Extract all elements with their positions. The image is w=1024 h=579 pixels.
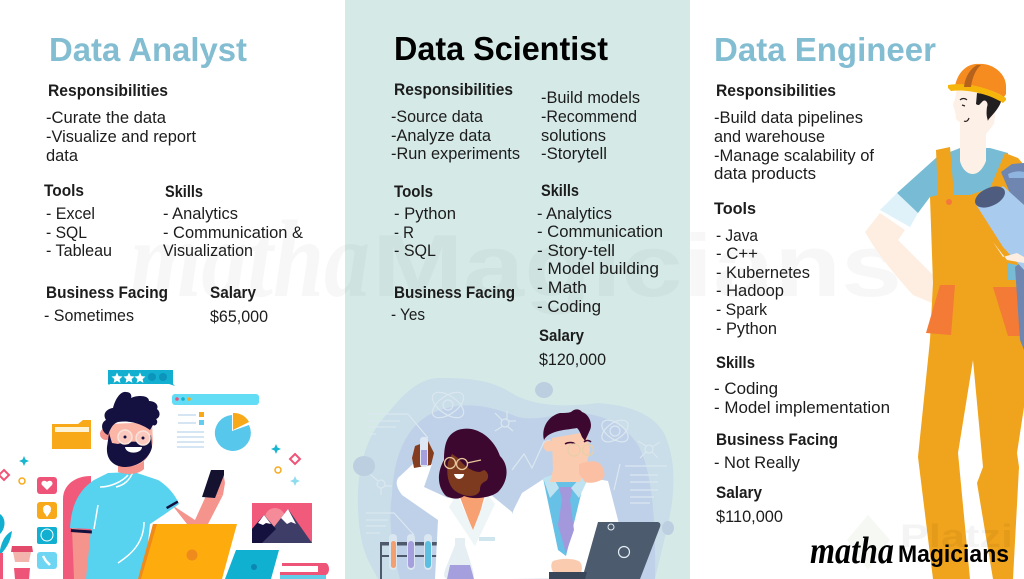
responsibilities: -Visualize and report [46,127,196,146]
business facing: - Not Really [714,453,800,472]
responsibilities column 1: -Source data [391,107,484,126]
responsibilities: Responsibilities [716,82,836,100]
skills: - Model building [537,259,659,278]
test tube rack [380,534,444,579]
skills: Skills [541,182,579,200]
watermark: platzi [847,515,1013,570]
responsibilities: -Curate the data [46,108,167,127]
tools: Tools [714,200,756,218]
skills: - Coding [537,297,601,316]
responsibilities column 1 [391,81,520,163]
salary: Salary [539,327,585,345]
responsibilities column 1: Responsibilities [394,81,513,99]
tools [44,182,112,260]
shirt [897,148,1008,213]
character body [70,392,225,579]
responsibilities column 2: -Build models [541,88,640,107]
watermark [130,198,902,320]
salary [716,484,783,526]
title: data analyst: Data Analyst [49,31,247,68]
tools: - Excel [46,204,95,223]
tools: - R [394,223,414,242]
business facing: - Yes [391,305,425,324]
salary: $65,000 [210,307,268,326]
responsibilities: data [46,146,79,165]
panel: data scientist background [345,0,690,579]
panel: data scientist [391,30,663,369]
tools: - Python [394,204,456,223]
logo: mathaMagicians: matha [810,530,894,572]
skills: - Story-tell [537,241,615,260]
plant and coffee cup [0,514,33,579]
tools: - Spark [716,300,767,319]
responsibilities column 2: solutions [541,126,606,145]
skills: Visualization [163,241,253,260]
business facing: Business Facing [394,284,515,302]
scientist woman [397,429,512,579]
small blobs [353,382,674,535]
tools: - SQL [46,223,87,242]
icon: folder [52,420,91,449]
tools [394,183,456,260]
watermark: matha [130,198,370,320]
tools: - Java [716,226,758,245]
tools: Tools [394,183,433,201]
responsibilities column 2: -Storytell [541,144,607,163]
safety helmet [948,64,1006,103]
business facing: Business Facing [716,431,838,449]
responsibilities [46,82,196,165]
arm and hand [865,213,938,303]
icons: app buttons [37,477,57,569]
responsibilities column 2 [541,88,640,163]
salary: Salary [716,484,763,502]
salary [210,284,268,326]
decorative blobs and atoms [366,387,667,535]
tools: - Hadoop [716,281,784,300]
responsibilities column 1: -Run experiments [391,144,520,163]
sleeve and cuff [880,193,918,227]
icon: rating banner [108,370,175,386]
responsibilities column 1: -Analyze data [391,126,492,145]
skills: - Analytics [537,204,612,223]
panel: data analyst [44,31,304,326]
panel: data engineer text [714,31,936,526]
decorative sparkles [0,444,300,486]
business facing: Business Facing [46,284,168,302]
responsibilities: Responsibilities [48,82,168,100]
skills: - Math [537,278,587,297]
background blob [358,378,674,579]
watermark: platzi: Platzi [900,518,1013,554]
skills [537,182,663,316]
overalls [918,147,1024,579]
skills [714,354,890,417]
rolled blueprints [972,163,1024,350]
business facing [44,284,168,325]
inner blob [390,405,655,579]
icon: report panel with pie chart [172,394,259,451]
skills: Skills [165,183,203,201]
bib button [946,199,952,205]
illustration: two scientists [353,378,674,579]
responsibilities: -Build data pipelines [714,108,863,127]
tools: - Tableau [46,241,112,260]
illustration: engineer [865,64,1024,579]
skills: - Model implementation [714,398,890,417]
head and neck [953,87,997,174]
skills: Skills [716,354,755,372]
laptop [549,522,660,579]
tools: - Kubernetes [716,263,810,282]
tools [714,200,810,338]
responsibilities: data products [714,164,816,183]
responsibilities [714,82,874,183]
laptops and books [138,524,329,579]
business facing [714,431,838,472]
skills: - Coding [714,379,778,398]
business facing [391,284,515,324]
tools: Tools [44,182,84,200]
chair [63,476,91,579]
salary [539,327,606,369]
logo: mathaMagicians [810,530,1009,572]
logo: mathaMagicians: Magicians [898,541,1009,568]
responsibilities: -Manage scalability of [714,146,874,165]
watermark: Magicians [372,216,902,315]
title: data engineer: Data Engineer [714,31,936,68]
skills: - Communication [537,222,663,241]
face details [960,98,969,121]
pockets [926,285,1024,336]
tools: - SQL [394,241,436,260]
salary: Salary [210,284,257,302]
tools: - Python [716,319,777,338]
title: data scientist: Data Scientist [394,30,608,67]
responsibilities column 2: -Recommend [541,107,637,126]
responsibilities: and warehouse [714,127,825,146]
salary: $120,000 [539,350,606,369]
skills: - Analytics [163,204,238,223]
illustration: analyst at laptop [0,370,329,579]
scientist man [501,409,630,579]
hair [976,93,1002,121]
business facing: - Sometimes [44,306,134,325]
skills: - Communication & [163,223,304,242]
tools: - C++ [716,244,758,263]
skills [163,183,304,260]
salary: $110,000 [716,507,783,526]
icon: picture of mountains [252,503,312,543]
